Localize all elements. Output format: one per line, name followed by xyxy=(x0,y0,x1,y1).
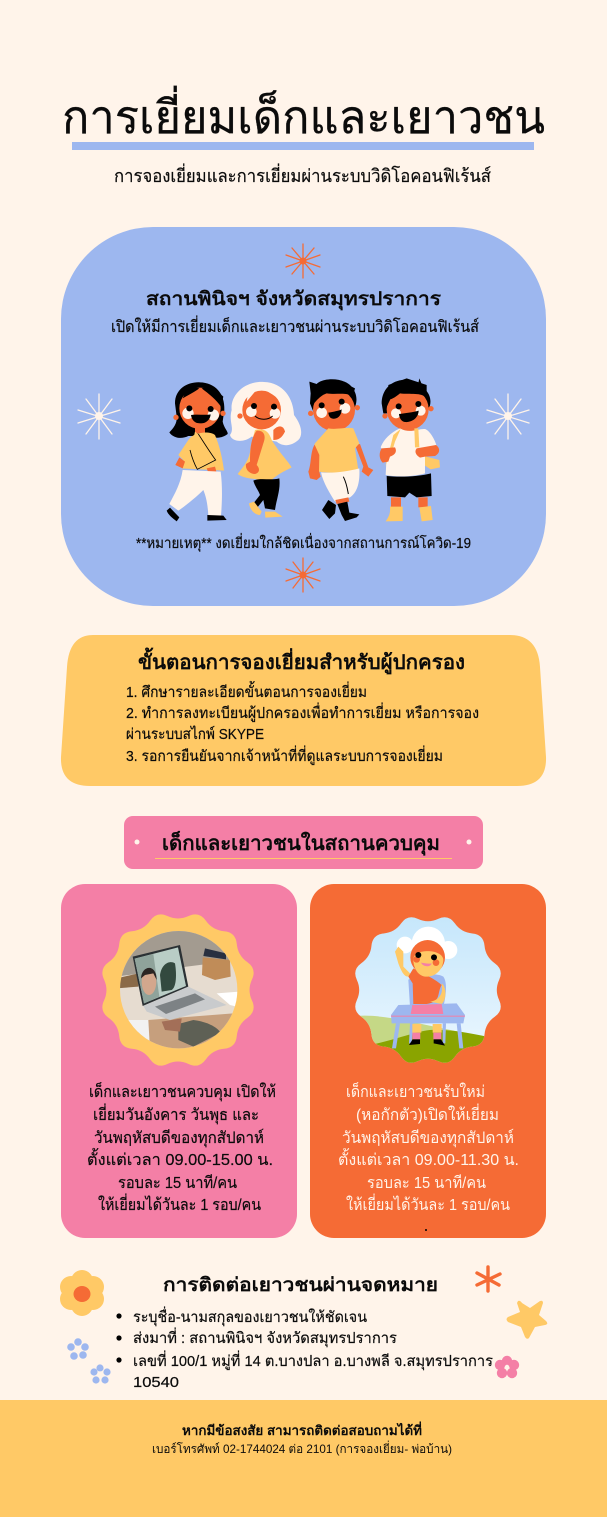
contact list: 10540 xyxy=(133,1374,179,1391)
subtitle: การจองเยี่ยมและการเยี่ยมผ่านระบบวิดิโอคอนฟิเร้นส์ xyxy=(114,163,491,186)
section banner: children in custody xyxy=(124,816,483,869)
booking steps list: ผ่านระบบสไกพ์ SKYPE xyxy=(126,725,264,743)
child 4 xyxy=(380,378,440,521)
note: **หมายเหตุ** งดเยี่ยมใกล้ชิดเนื่องจากสถานการณ์โควิด-19 xyxy=(136,533,471,552)
card text: วันพฤหัสบดีของทุกสัปดาห์ xyxy=(342,1128,514,1148)
banner heading: เด็กและเยาวชนในสถานควบคุม xyxy=(162,830,440,856)
booking steps list: 1. ศึกษารายละเอียดขั้นตอนการจองเยี่ยม xyxy=(126,681,367,701)
icon: pink flower xyxy=(495,1356,519,1378)
illustration: four children xyxy=(167,378,440,521)
icon: white sparkle left xyxy=(78,394,120,439)
icon: orange sparkle bottom xyxy=(286,558,320,592)
contact list: เลขที่ 100/1 หมู่ที่ 14 ต.บางปลา อ.บางพลี จ.สมุทรปราการ xyxy=(133,1350,493,1371)
title: การเยี่ยมเด็กและเยาวชน xyxy=(62,85,545,143)
card text: วันพฤหัสบดีของทุกสัปดาห์ xyxy=(94,1128,264,1148)
footer heading: หากมีข้อสงสัย สามารถติดต่อสอบถามได้ที่ xyxy=(182,1421,422,1438)
footer band xyxy=(0,1400,607,1517)
icon: yellow flower xyxy=(60,1270,104,1316)
panel: new arrivals visiting xyxy=(310,884,546,1238)
child 3 xyxy=(308,379,373,521)
booking steps list: 2. ทำการลงทะเบียนผู้ปกครองเพื่อทำการเยี่ยม หรือการจอง xyxy=(126,702,479,722)
child 2 xyxy=(230,382,301,518)
panel: detained youth visiting xyxy=(61,884,297,1238)
icon: orange asterisk xyxy=(477,1267,500,1291)
panel: facility information xyxy=(61,227,546,606)
image: scalloped video call photo xyxy=(102,914,254,1066)
icon: blue flower xyxy=(67,1338,89,1360)
card text: เด็กและเยาวชนรับใหม่ xyxy=(346,1081,485,1101)
panel: booking steps xyxy=(61,635,546,786)
card text: ให้เยี่ยมได้วันละ 1 รอบ/คน xyxy=(346,1193,510,1214)
card text xyxy=(87,1081,276,1214)
contact list xyxy=(116,1306,493,1391)
contact heading: การติดต่อเยาวชนผ่านจดหมาย xyxy=(163,1275,438,1296)
panel heading: สถานพินิจฯ จังหวัดสมุทรปราการ xyxy=(146,289,442,311)
card text xyxy=(338,1081,519,1214)
illustration: child at desk xyxy=(355,917,501,1063)
contact list: ระบุชื่อ-นามสกุลของเยาวชนให้ชัดเจน xyxy=(133,1306,367,1327)
card text: รอบละ 15 นาที/คน xyxy=(367,1174,486,1192)
contact list: ส่งมาที่ : สถานพินิจฯ จังหวัดสมุทรปราการ xyxy=(133,1327,397,1348)
card text: เด็กและเยาวชนควบคุม เปิดให้ xyxy=(89,1081,276,1102)
booking steps list xyxy=(126,681,479,765)
icon: blue flower small xyxy=(90,1364,111,1384)
card text: ให้เยี่ยมได้วันละ 1 รอบ/คน xyxy=(98,1193,261,1214)
icon: white sparkle right xyxy=(487,394,529,439)
card text: เยี่ยมวันอังคาร วันพุธ และ xyxy=(93,1103,259,1125)
panel subheading: เปิดให้มีการเยี่ยมเด็กและเยาวชนผ่านระบบวิดิโอคอนฟิเร้นส์ xyxy=(111,315,479,336)
booking steps list: 3. รอการยืนยันจากเจ้าหน้าที่ที่ดูแลระบบการจองเยี่ยม xyxy=(126,745,443,765)
child 1 xyxy=(167,382,228,521)
card text: รอบละ 15 นาที/คน xyxy=(118,1174,237,1192)
icon: orange sparkle top xyxy=(286,244,320,278)
booking heading: ขั้นตอนการจองเยี่ยมสำหรับผู้ปกครอง xyxy=(138,647,465,676)
card text: ตั้งแต่เวลา 09.00-11.30 น. xyxy=(338,1148,519,1169)
card text: (หอกักตัว)เปิดให้เยี่ยม xyxy=(356,1103,499,1124)
section: contact by letter xyxy=(60,1267,547,1391)
icon: yellow star xyxy=(506,1301,547,1339)
card text: ตั้งแต่เวลา 09.00-15.00 น. xyxy=(87,1148,273,1169)
title underline xyxy=(72,142,534,150)
footer phone: เบอร์โทรศัพท์ 02-1744024 ต่อ 2101 (การจองเยี่ยม- พ่อบ้าน) xyxy=(152,1440,452,1456)
